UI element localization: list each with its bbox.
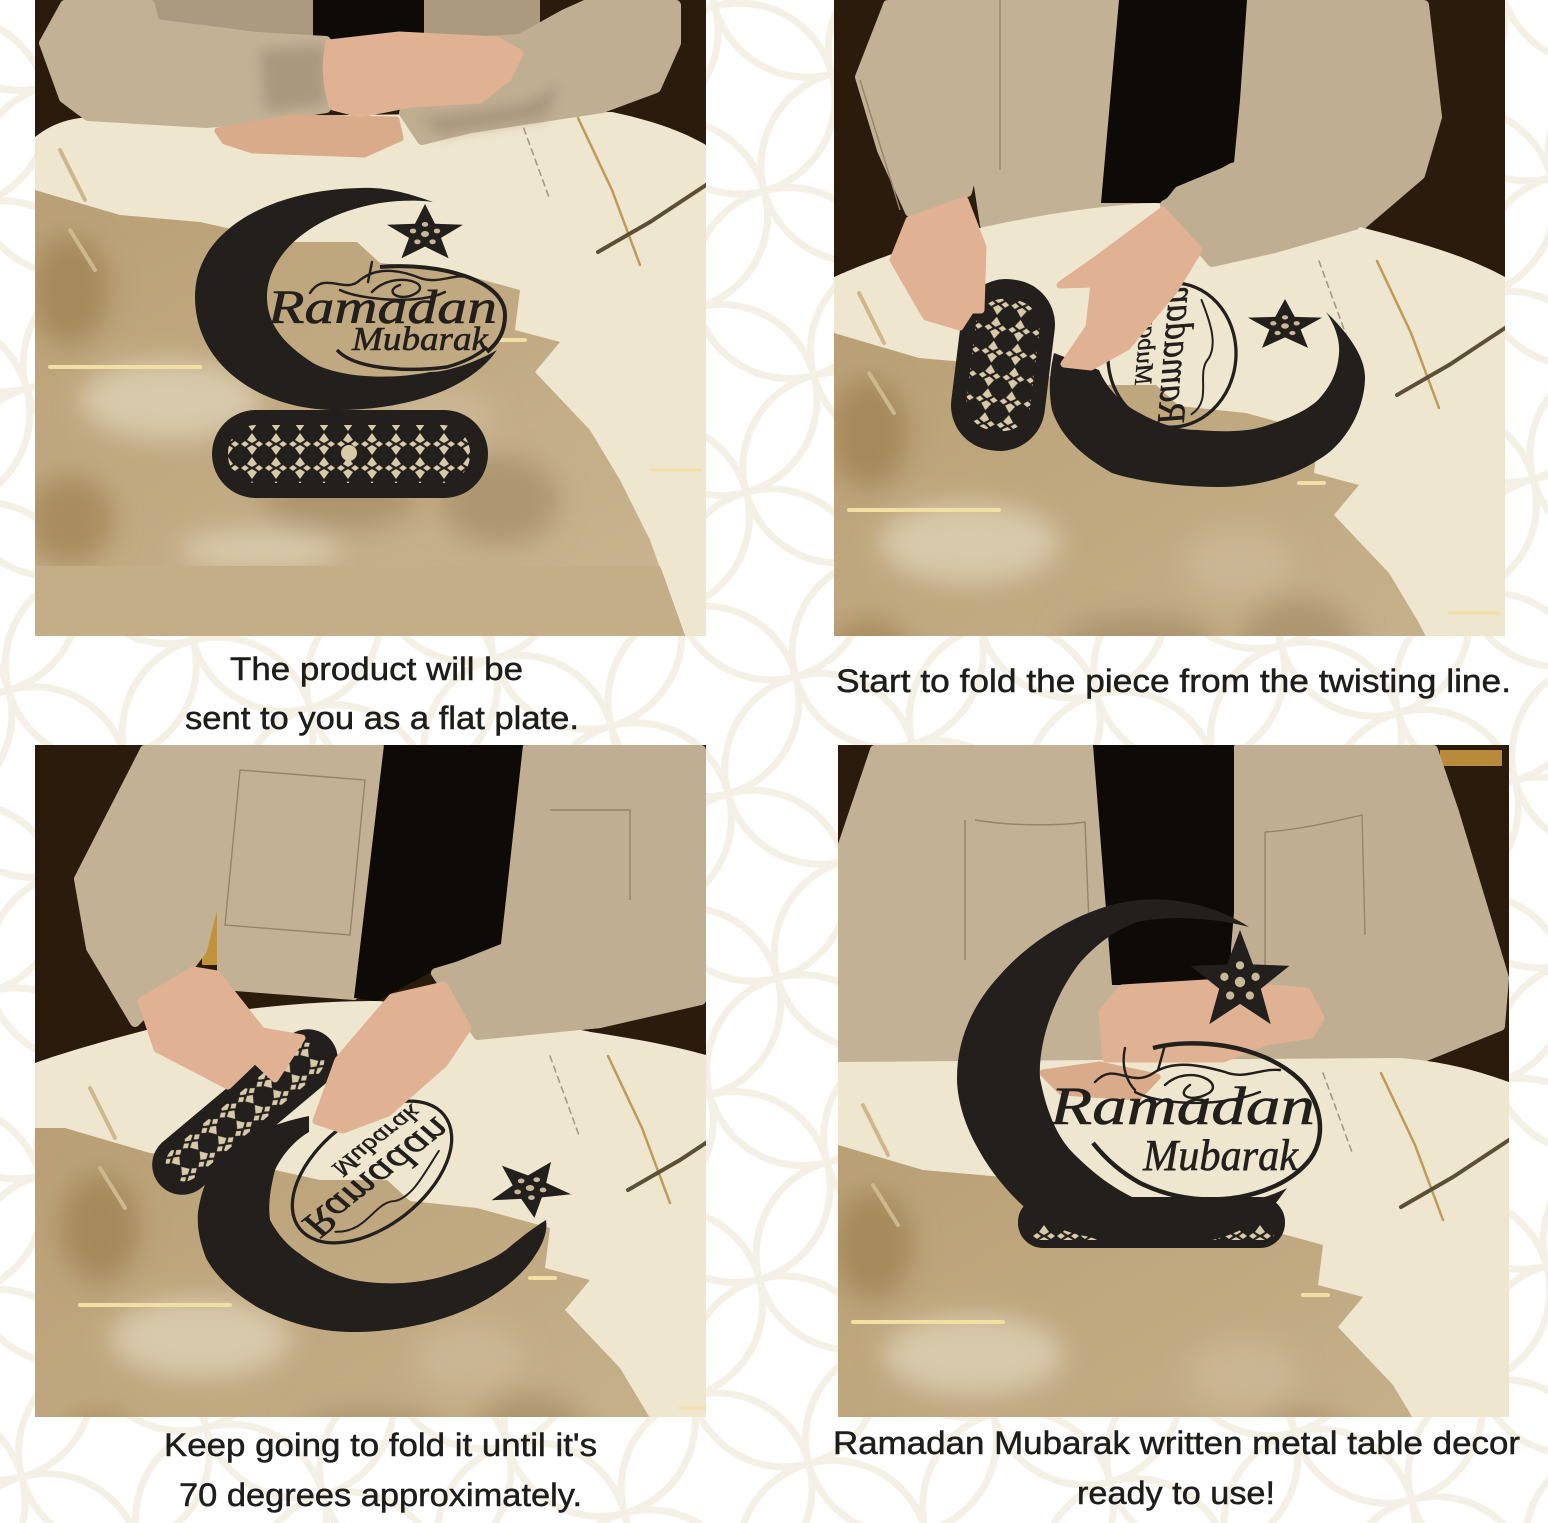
- chair glimpse: [966, 85, 986, 155]
- pocket lines: [225, 770, 630, 935]
- lattice base: [951, 279, 1055, 451]
- panel: step 1 photo: [0, 0, 745, 636]
- left hand: [141, 970, 302, 1086]
- right side of jacket: [436, 750, 701, 1035]
- panel: step 3 photo: [35, 745, 706, 1417]
- lattice base: [212, 410, 488, 498]
- caption: step 3: [164, 1427, 597, 1513]
- right side of jacket: [1236, 750, 1504, 1062]
- caption: step 1: The product will be: [230, 651, 523, 687]
- right cuff: [436, 948, 600, 1035]
- hanging star: [1248, 299, 1322, 348]
- panel: step 2 photo: [834, 0, 1505, 636]
- t-shirt: [1093, 745, 1234, 985]
- table with marble: [35, 1001, 706, 1417]
- left hand: [893, 200, 983, 327]
- left sleeve and jacket: [843, 750, 1120, 1062]
- hands: [218, 35, 520, 154]
- hanging star: [1191, 930, 1289, 1024]
- hands: [1043, 983, 1321, 1097]
- sleeve folds: [860, 0, 1000, 210]
- lattice base: [1018, 1197, 1285, 1248]
- t-shirt: [1101, 0, 1247, 203]
- crescent moon: [198, 1116, 546, 1332]
- calligraphy plate: [1106, 282, 1238, 428]
- t-shirt: [313, 0, 424, 40]
- hanging star: [492, 1162, 571, 1218]
- calligraphy plate: Ramadan: [1149, 284, 1205, 428]
- chair glimpse: [202, 910, 217, 965]
- calligraphy plate: [267, 262, 505, 369]
- left sleeve and jacket: [860, 5, 1158, 225]
- sleeve shading: [260, 45, 560, 135]
- caption: step 4: [833, 1425, 1520, 1511]
- calligraphy plate: Mubarak: [351, 321, 489, 358]
- calligraphy plate: Ramadan: [1049, 1076, 1315, 1136]
- caption: step 2: Start to fold the piece from the twisting line.: [836, 663, 1511, 699]
- caption: step 3: Keep going to fold it until it's: [164, 1427, 597, 1463]
- caption: step 4: Ramadan Mubarak written metal table decor: [833, 1425, 1520, 1461]
- crescent moon: [195, 188, 497, 410]
- background light: [1440, 750, 1502, 766]
- calligraphy plate: Mubarak: [1142, 1131, 1299, 1180]
- left sleeve and jacket: [79, 750, 382, 1022]
- calligraphy plate: Ramadan: [267, 281, 497, 334]
- calligraphy plate: Mubarak: [1129, 289, 1164, 388]
- jacket front: [150, 0, 540, 40]
- calligraphy plate: Mubarak: [327, 1098, 426, 1184]
- left sleeve: [44, 5, 326, 123]
- table with marble: [35, 112, 706, 636]
- lattice base: [152, 1029, 338, 1195]
- crescent moon: [957, 899, 1287, 1248]
- right hand: [316, 985, 468, 1130]
- caption: step 4: ready to use!: [1077, 1475, 1275, 1511]
- calligraphy plate: Ramadan: [295, 1108, 458, 1249]
- hanging star: [387, 204, 463, 258]
- crescent moon: [1050, 312, 1365, 487]
- right cuff: [1165, 150, 1355, 262]
- right sleeve: [404, 5, 676, 140]
- table with marble: [834, 203, 1505, 636]
- calligraphy plate: [1049, 1043, 1320, 1199]
- panel: step 4 photo: [803, 745, 1548, 1523]
- table with marble: [803, 1015, 1548, 1523]
- caption: step 1: sent to you as a flat plate.: [185, 700, 579, 736]
- right hand: [1060, 210, 1199, 367]
- right side of jacket: [1168, 5, 1437, 262]
- caption: step 3: 70 degrees approximately.: [179, 1477, 582, 1513]
- pocket lines: [965, 815, 1365, 970]
- t-shirt: [354, 745, 523, 1001]
- caption: step 1: [185, 651, 579, 736]
